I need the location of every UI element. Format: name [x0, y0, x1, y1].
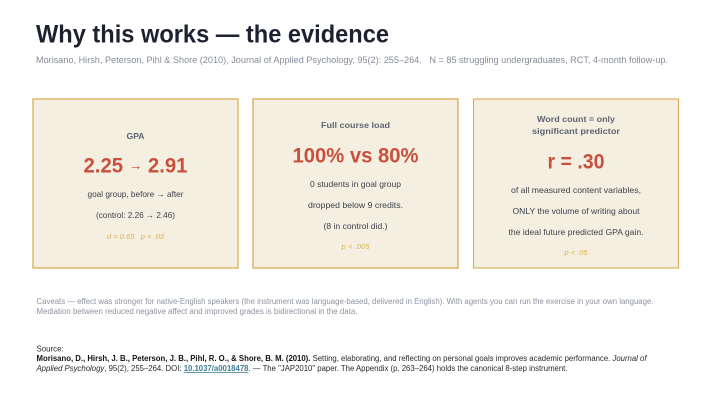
title: Why this works — the evidence [36, 20, 389, 48]
caveats text [36, 297, 654, 316]
body text: line 2: ONLY the volume of writing about [512, 206, 640, 216]
body text: line 3: (8 in control did.) [324, 221, 388, 231]
big stat: GPA change: 2.91 [142, 155, 188, 178]
body text: line 3: the ideal future predicted GPA gain. [508, 227, 644, 237]
panel: word count [474, 99, 678, 268]
big stat: GPA change: 2.25 [84, 155, 124, 178]
body text: control group: (control: 2.26 → 2.46) [96, 210, 175, 220]
panel heading: word count: significant predictor [532, 126, 621, 136]
source reference: Morisano, D., Hirsh, J. B., Peterson, J. B., Pihl, R. O., & Shore, B. M. (2010). Setting, elaborating, and reflecting on personal goals improves academic performance. Journal of [36, 354, 647, 363]
big stat: GPA change: → [129, 157, 142, 173]
source reference: Applied Psychology, 95(2), 255–264. DOI: 10.1037/a0018478. — The "JAP2010" paper. The Appendix (p. 263–264) holds the canonical 8-step instrument. [36, 364, 568, 373]
statistics note: p < .005 [340, 242, 370, 251]
statistics note: p < .05 [564, 248, 588, 257]
panel heading: word count: Word count = only [537, 114, 615, 124]
body text: line 2: dropped below 9 credits. [308, 200, 403, 210]
body text: line 1: 0 students in goal group [310, 179, 401, 189]
panel heading: full course load: Full course load [321, 120, 390, 130]
body text: line 1: of all measured content variables, [511, 185, 641, 195]
source reference [36, 344, 647, 373]
subtitle: citation: Morisano, Hirsh, Peterson, Pihl & Shore (2010), Journal of Applied Psychology, 95(2): 255–264. N = 85 struggling undergraduates, RCT, 4-month follow-up. [36, 55, 668, 65]
body text: goal group: goal group, before → after [88, 189, 184, 199]
panel: GPA [33, 99, 238, 268]
big stat: r = .30: r = .30 [548, 150, 604, 173]
panel heading: GPA: GPA [126, 131, 144, 141]
source reference: Source: [36, 344, 64, 354]
statistics note: d = 0.65 p < .03 [107, 232, 165, 241]
caveats text: Mediation between reduced negative affect and improved grades is bidirectional in the data. [36, 307, 358, 316]
panel heading: word count [532, 114, 621, 136]
panel: full course load [253, 99, 458, 268]
big stat: 100% vs 80%: 100% vs 80% [292, 144, 419, 168]
caveats text: Caveats — effect was stronger for native-English speakers (the instrument was language-based, delivered in English). With agents you can run the exercise in your own language. [36, 297, 654, 306]
